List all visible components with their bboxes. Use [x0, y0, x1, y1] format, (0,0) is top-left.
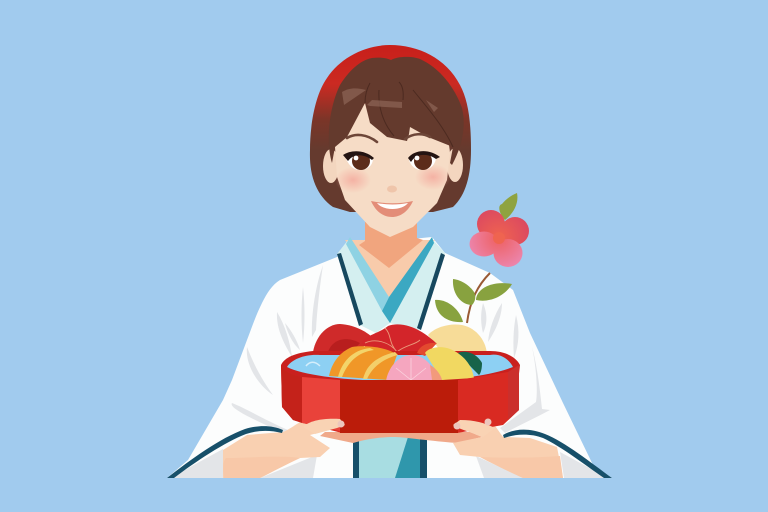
eyes — [343, 151, 440, 170]
water highlight — [306, 362, 320, 366]
palms under box — [320, 432, 482, 443]
right arm shade — [480, 456, 563, 478]
face — [335, 98, 450, 237]
left arm shade — [223, 457, 300, 478]
flower — [470, 193, 529, 267]
ears — [323, 148, 463, 183]
food: yellow fruit behind — [428, 324, 487, 356]
neck: shadow — [359, 222, 423, 268]
cheeks — [335, 164, 451, 193]
box inner rim — [281, 351, 520, 382]
robe fold shadows — [170, 265, 608, 478]
food: red fruit left — [313, 324, 375, 354]
food: orange slices — [329, 346, 398, 380]
hair and headband back — [310, 45, 471, 212]
food: red meat — [362, 324, 436, 358]
hair strands — [365, 82, 453, 147]
collar panels — [337, 237, 445, 333]
food: green item — [458, 352, 482, 375]
mouth — [371, 201, 413, 217]
robe body — [167, 237, 612, 478]
right arm — [453, 420, 563, 478]
hair highlights — [342, 88, 438, 112]
neck: chest skin — [345, 240, 435, 297]
box body — [281, 365, 519, 433]
nose — [387, 186, 397, 192]
food: yellow round — [425, 347, 474, 380]
lower robe centre panels — [353, 437, 427, 478]
food: pink flower slice — [386, 355, 442, 381]
sleeve trim left — [167, 426, 283, 478]
hair fringe — [329, 57, 464, 165]
sleeve trim right — [503, 430, 612, 478]
eyebrows — [347, 134, 430, 142]
left fingers — [303, 419, 345, 434]
left arm — [223, 418, 345, 478]
right fingers — [453, 418, 495, 437]
plant sprig — [435, 273, 512, 323]
water in box — [287, 355, 513, 381]
food: small red slice — [417, 343, 437, 356]
